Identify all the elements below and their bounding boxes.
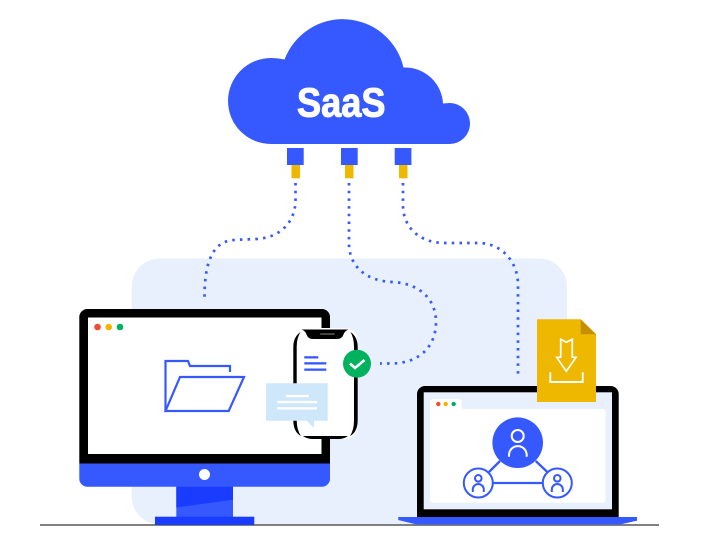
laptop <box>398 386 637 524</box>
phone text lines <box>304 356 326 371</box>
icon: folder <box>166 361 244 411</box>
laptop screen <box>424 392 612 509</box>
phone side edges <box>293 332 358 439</box>
file fold <box>581 319 596 334</box>
cloud with SaaS label <box>228 19 470 144</box>
cloud label: SaaS <box>297 80 386 126</box>
download tray <box>550 372 583 382</box>
phone body <box>293 328 358 439</box>
monitor screen <box>88 318 322 454</box>
icon: download file <box>537 319 596 402</box>
file page <box>537 319 596 402</box>
monitor chin <box>79 464 330 487</box>
monitor stand <box>155 485 254 525</box>
dotted connection lines <box>204 183 518 376</box>
network links <box>489 461 547 483</box>
desktop monitor <box>79 309 330 525</box>
laptop base <box>398 517 637 524</box>
chat bubble <box>266 383 328 428</box>
window dots <box>94 324 123 330</box>
panel: pale blue background <box>132 258 567 524</box>
download arrow <box>557 339 576 371</box>
cloud shape <box>228 19 470 144</box>
icon: right user <box>543 468 572 498</box>
icon: left user <box>464 468 493 498</box>
ground line <box>40 524 659 526</box>
browser dots <box>436 402 456 406</box>
monitor frame <box>79 309 330 464</box>
icon: main user <box>492 417 543 468</box>
power button <box>199 469 210 480</box>
phone speaker <box>320 333 335 335</box>
icon: check badge <box>343 350 371 378</box>
laptop frame <box>417 386 619 518</box>
smartphone <box>266 328 371 439</box>
phone notch <box>302 330 348 339</box>
browser window <box>430 399 606 503</box>
connector plugs <box>287 148 411 178</box>
